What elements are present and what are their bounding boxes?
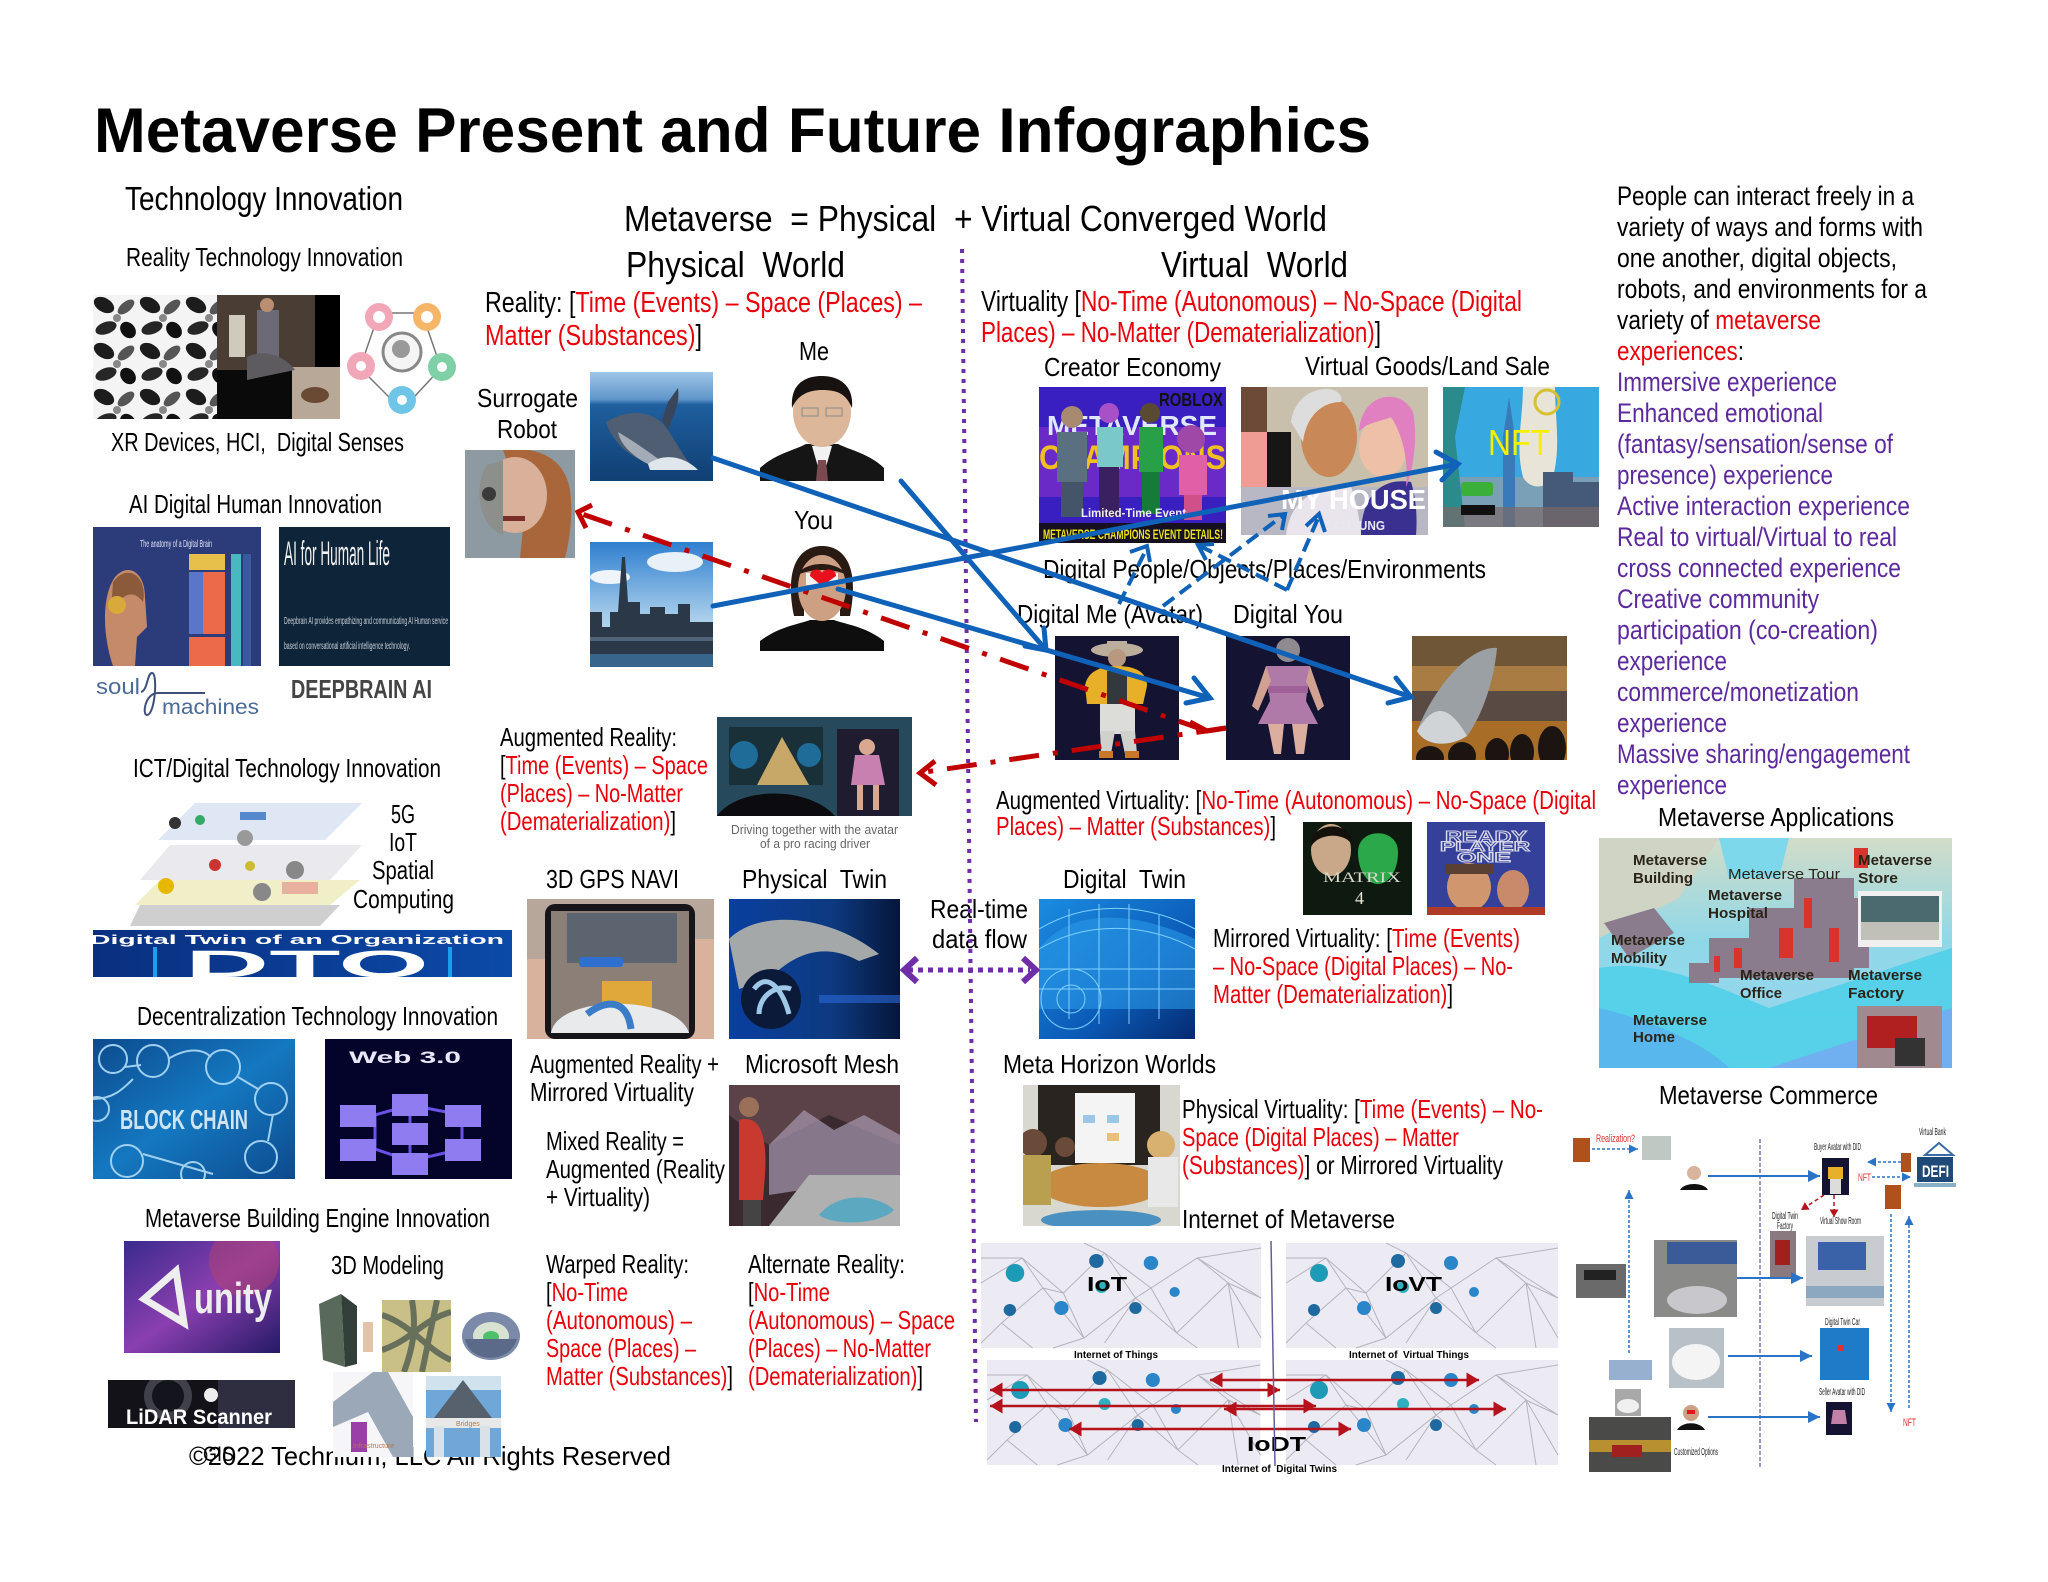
image: ai for human life [279,527,450,666]
panel: internet of things: IoT [1087,1274,1127,1296]
image: 3d model bridge [426,1376,501,1457]
labels: application names: Metaverse [1611,932,1685,949]
panel: internet of digital twins: Internet of Digital Twins [1222,1464,1337,1475]
label: real-time data flow: data flow [932,924,1027,954]
image: new york skyline [590,542,713,667]
labels: application names: Hospital [1708,905,1768,922]
text: people can interact: participation (co-creation) [1617,615,1878,645]
text: mixed reality: Mixed Reality = [546,1126,684,1156]
image: whale in gym [1412,636,1567,770]
image: web 3.0 [325,1039,512,1179]
heading: metaverse applications: Metaverse Applications [1658,802,1894,832]
text: physical virtuality: Space (Digital Places) – Matter [1182,1122,1459,1152]
image: physical twin car [729,899,900,1039]
arrow: red dash-dot surrogate [578,505,1226,785]
text: mirrored virtuality: Mirrored Virtuality: [Time (Events) [1213,923,1520,953]
text: people can interact: Massive sharing/engagement [1617,739,1910,769]
text: people can interact: presence) experience [1617,460,1833,490]
image: ready player one poster: ONE [1457,849,1511,865]
image: meta horizon worlds [1019,1085,1180,1230]
labels: ict technologies: IoT [389,827,417,857]
diagram: network layers [130,803,362,926]
heading: 3d modeling: 3D Modeling [331,1250,444,1280]
text: warped reality: Space (Places) – [546,1333,696,1363]
text: people can interact: People can interact freely in a [1617,181,1915,211]
image: roblox: Limited-Time Event [1081,506,1186,520]
text: augmented reality: (Dematerialization)] [500,806,676,836]
text: alternate reality: (Dematerialization)] [748,1361,923,1391]
text: people can interact: variety of metaverse [1617,305,1821,335]
image: nft city: NFT [1488,422,1550,463]
image: nft city [1443,387,1599,527]
labels: application names: Office [1740,985,1782,1002]
caption: driving with avatar [731,822,899,851]
label: me: Me [799,336,829,366]
heading: digital people objects: Digital People/Objects/Places/Environments [1043,554,1486,584]
label: physical twin: Physical Twin [742,864,887,894]
text: people can interact: Active interaction experience [1617,491,1910,521]
label: surrogate robot [477,383,578,444]
title: Metaverse Present and Future Infographics [94,96,1371,166]
text: mixed reality: Augmented (Reality [546,1154,725,1184]
label: you: You [794,505,833,535]
labels: application names: Building [1633,870,1693,887]
text: augmented reality + mirrored virtuality [530,1049,719,1107]
image: xr devices [93,295,217,419]
heading: reality technology innovation: Reality Technology Innovation [126,242,403,272]
footer: copyright: GIS [203,1443,234,1466]
labels: application names: Metaverse [1858,852,1932,869]
panel: internet of digital twins [987,1360,1558,1475]
banner: digital twin of an organization [90,930,512,986]
image: matrix 4 poster: MATRIX [1323,870,1401,886]
label: virtual goods: Virtual Goods/Land Sale [1305,351,1550,381]
label: digital me avatar: Digital Me (Avatar) [1017,599,1203,629]
diagram: metaverse commerce flow [1573,1127,1956,1472]
text: virtuality definition [981,286,1522,349]
image: ready player one poster: READY [1445,829,1527,846]
logo: deepbrain ai: DEEPBRAIN AI [291,674,432,704]
diagram: metaverse commerce flow: Digital Twin [1772,1211,1798,1222]
text: physical virtuality: Physical Virtuality: [Time (Events) – No- [1182,1094,1543,1124]
banner: digital twin of an organization: Digital Twin of an Organization [90,932,504,947]
text: people can interact: robots, and environments for a [1617,274,1928,304]
arrow: blue mapping lines [713,452,1458,703]
heading: decentralization: Decentralization Technology Innovation [137,1001,498,1031]
label: digital twin: Digital Twin [1063,864,1186,894]
image: 3d model road [382,1300,451,1372]
image: 3d model building [315,1292,379,1372]
image: ready player one poster: PLAYER [1440,838,1530,854]
heading: metaverse commerce: Metaverse Commerce [1659,1080,1878,1110]
panel: internet of things: Internet of Things [1074,1350,1158,1361]
labels: ict technologies [353,799,454,914]
labels: application names: Metaverse [1848,967,1922,984]
label: real-time data flow [930,894,1028,954]
label: 3d gps navi: 3D GPS NAVI [546,864,679,894]
panel: internet of digital twins: IoDT [1247,1434,1306,1456]
text: physical virtuality [1182,1094,1543,1180]
text: virtuality definition: Virtuality [No-Time (Autonomous) – No-Space (Digital [981,286,1522,318]
text: people can interact: Creative community [1617,584,1819,614]
text: people can interact: Enhanced emotional [1617,398,1823,428]
caption: driving with avatar: of a pro racing driver [760,836,871,851]
image: lidar scanner [108,1372,295,1429]
diagram: metaverse commerce flow: Virtual Bank [1919,1127,1946,1138]
labels: application names: Home [1633,1029,1675,1046]
diagram: metaverse commerce flow: NFT [1858,1172,1871,1184]
label: meta horizon worlds: Meta Horizon Worlds [1003,1049,1216,1079]
image: 3d model stadium [462,1312,520,1360]
diagram: metaverse commerce flow: DEFI [1922,1162,1949,1181]
text: reality definition [485,287,923,352]
image: me portrait [760,372,884,481]
text: mixed reality: + Virtuality) [546,1182,650,1212]
labels: application names: Mobility [1611,950,1668,967]
panel: metaverse applications map [1599,838,1952,1068]
heading: physical world: Physical World [626,244,845,285]
arrow: real-time data flow [904,958,1036,982]
text: people can interact: Immersive experience [1617,367,1837,397]
text: people can interact: variety of ways and forms with [1617,212,1923,242]
diagram: metaverse commerce flow: Seller Avatar with DID [1819,1387,1865,1398]
text: augmented reality + mirrored virtuality: Augmented Reality + [530,1049,719,1079]
text: warped reality [546,1249,733,1391]
text: physical virtuality: (Substances)] or Mirrored Virtuality [1182,1150,1503,1180]
text: people can interact: experience [1617,770,1727,800]
image: matrix 4 poster: 4 [1355,888,1364,908]
image: 3d model bridge: Bridges [456,1421,480,1428]
text: warped reality: Matter (Substances)] [546,1361,733,1391]
image: web 3.0: Web 3.0 [349,1048,461,1067]
text: virtuality definition: Places) – No-Matter (Dematerialization)] [981,317,1381,349]
text: alternate reality: (Autonomous) – Space [748,1305,955,1335]
diagram: metaverse commerce flow: Digital Twin Car [1825,1317,1860,1328]
image: avatar digital you [1226,636,1350,760]
image: my house samsung: SAMSUNG [1325,518,1385,533]
text: augmented reality: (Places) – No-Matter [500,778,683,808]
heading: ai digital human: AI Digital Human Innovation [129,489,382,519]
text: people can interact: experience [1617,708,1727,738]
text: reality definition: Reality: [Time (Events) – Space (Places) – [485,287,923,319]
diagram: metaverse commerce flow: Factory [1777,1221,1793,1232]
image: digital twin car [1039,899,1195,1039]
text: warped reality: (Autonomous) – [546,1305,692,1335]
panel: internet of virtual things: Internet of Virtual Things [1349,1350,1469,1361]
text: reality definition: Matter (Substances)] [485,320,702,352]
label: surrogate robot: Robot [497,414,558,444]
footer: copyright: ©2022 Technium, LLC All Rights Reserved [189,1441,671,1471]
image: matrix 4 poster [1303,822,1412,915]
label: surrogate robot: Surrogate [477,383,578,413]
image: surrogate robot [465,449,575,558]
text: augmented virtuality: Augmented Virtuality: [No-Time (Autonomous) – No-Space (Digital [996,785,1596,815]
text: people can interact: cross connected experience [1617,553,1901,583]
image: driving with avatar [717,717,912,816]
text: alternate reality [748,1249,955,1391]
image: block chain [85,1039,295,1186]
image: 3d model infrastructure [333,1372,413,1457]
heading: converged world equation: Metaverse = Physical + Virtual Converged World [624,198,1327,239]
text: people can interact: commerce/monetization [1617,677,1859,707]
labels: application names: Metaverse Tour [1728,866,1840,883]
image: digital brain [93,527,261,666]
text: mirrored virtuality: Matter (Dematerialization)] [1213,979,1453,1009]
labels: ict technologies: Spatial [372,855,434,885]
text: mixed reality [546,1126,725,1212]
text: alternate reality: (Places) – No-Matter [748,1333,931,1363]
labels: application names [1611,852,1932,1046]
diagram: metaverse commerce flow: Virtual Show Room [1820,1216,1861,1227]
heading: internet of metaverse: Internet of Metaverse [1182,1204,1395,1234]
labels: application names: Store [1858,870,1898,887]
logo: soul machines: soul [96,674,140,699]
image: microsoft mesh [729,1085,900,1226]
text: mirrored virtuality: – No-Space (Digital Places) – No- [1213,951,1513,981]
caption: driving with avatar: Driving together with the avatar [731,822,899,837]
text: augmented reality: [Time (Events) – Space [500,750,708,780]
labels: application names: Metaverse [1633,852,1707,869]
text: mirrored virtuality [1213,923,1520,1009]
image: whale [590,372,713,481]
labels: application names: Metaverse [1708,887,1782,904]
text: warped reality: [No-Time [546,1277,628,1307]
image: my house samsung: MY HOUSE [1281,484,1426,515]
heading: ict digital technology: ICT/Digital Technology Innovation [133,753,441,783]
image: ready player one poster [1427,822,1545,915]
panel: internet of things [981,1243,1261,1361]
diagram: metaverse commerce flow: NFT [1903,1417,1916,1429]
image: 3d model infrastructure: Infrastructure [353,1443,394,1450]
text: people can interact: Real to virtual/Virtual to real [1617,522,1897,552]
image: avatar digital me [1055,636,1179,760]
heading: metaverse building engine: Metaverse Building Engine Innovation [145,1203,490,1233]
text: augmented virtuality [996,785,1596,841]
label: real-time data flow: Real-time [930,894,1028,924]
divider: physical and virtual boundary [962,249,976,1422]
text: people can interact: one another, digital objects, [1617,243,1897,273]
diagram: metaverse commerce flow: Buyer Avatar with DID [1814,1142,1861,1153]
image: roblox [1039,387,1226,543]
labels: application names: Factory [1848,985,1905,1002]
text: people can interact: (fantasy/sensation/sense of [1617,429,1893,459]
banner: digital twin of an organization: DTO [185,944,429,986]
text: people can interact: experience [1617,646,1727,676]
text: people can interact [1617,181,1928,800]
labels: application names: Metaverse [1740,967,1814,984]
text: augmented virtuality: Places) – Matter (Substances)] [996,811,1276,841]
label: creator economy: Creator Economy [1044,352,1221,382]
panel: internet of virtual things [1286,1243,1558,1361]
logo: soul machines: machines [162,696,259,719]
icon: digital senses diagram [347,303,456,414]
heading: technology innovation: Technology Innovation [125,180,403,217]
panel: internet of virtual things: IoVT [1385,1274,1442,1296]
labels: ict technologies: 5G [391,799,415,829]
text: alternate reality: [No-Time [748,1277,830,1307]
arrow: blue dashed digital links [1119,514,1325,606]
heading: virtual world: Virtual World [1161,244,1348,285]
label: microsoft mesh: Microsoft Mesh [745,1049,899,1079]
image: unity [124,1226,280,1353]
labels: application names: Metaverse [1633,1012,1707,1029]
logo: soul machines [96,673,259,719]
text: people can interact: experiences: [1617,336,1744,366]
text: augmented reality + mirrored virtuality: Mirrored Virtuality [530,1077,694,1107]
image: ar gps navigation [527,899,714,1039]
image: my house samsung [1241,387,1428,535]
labels: ict technologies: Computing [353,884,454,914]
text: alternate reality: Alternate Reality: [748,1249,905,1279]
text: augmented reality [500,722,708,836]
image: roblox: METAVERSE [1047,410,1217,441]
image: lidar scanner: LiDAR Scanner [126,1406,272,1429]
label: digital you: Digital You [1233,599,1343,629]
image: hci people [217,295,340,419]
caption: xr devices: XR Devices, HCI, Digital Senses [111,427,404,457]
text: warped reality: Warped Reality: [546,1249,689,1279]
text: augmented reality: Augmented Reality: [500,722,677,752]
diagram: metaverse commerce flow: Realization? [1596,1133,1635,1145]
diagram: metaverse commerce flow: Customized Options [1674,1447,1718,1458]
image: you portrait [760,546,884,651]
